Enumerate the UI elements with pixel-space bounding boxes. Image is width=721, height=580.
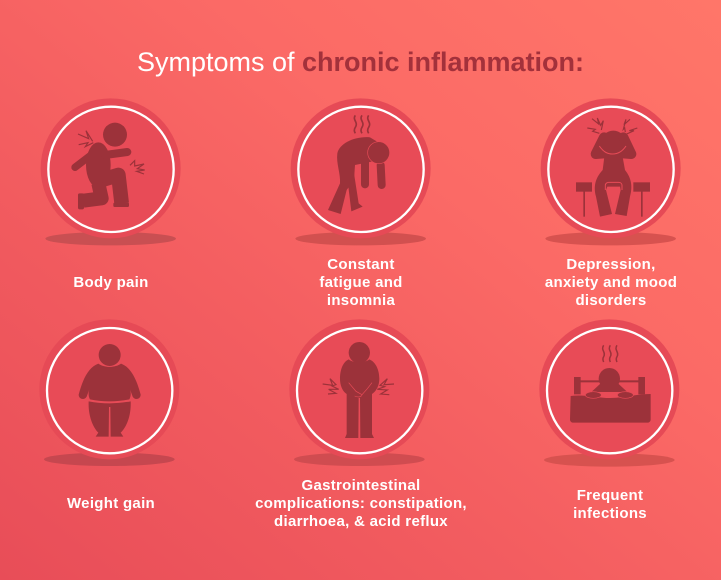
label: gastrointestinal: diarrhoea, & acid reflux	[274, 513, 448, 530]
label: body pain: Body pain	[73, 274, 149, 291]
title: Symptoms of chronic inflammation:	[137, 47, 584, 77]
icon: body pain	[41, 98, 181, 245]
label: fatigue	[319, 256, 403, 309]
label: gastrointestinal: complications: constipation,	[255, 495, 467, 512]
label: gastrointestinal: Gastrointestinal	[302, 477, 420, 494]
label: infections: Frequent	[577, 487, 643, 504]
icon: fatigue	[291, 98, 431, 245]
label: weight gain: Weight gain	[67, 495, 155, 512]
label: depression	[545, 256, 677, 309]
icon: infections	[539, 319, 679, 467]
label: gastrointestinal	[255, 477, 467, 530]
label: fatigue: insomnia	[327, 292, 395, 309]
icon: gastrointestinal	[289, 319, 429, 466]
label: fatigue: Constant	[327, 256, 395, 273]
icon: weight gain	[39, 319, 179, 466]
label: infections	[573, 487, 647, 522]
label: depression: Depression,	[566, 256, 656, 273]
icon: depression	[541, 98, 681, 245]
label: depression: disorders	[575, 292, 647, 309]
label: fatigue: fatigue and	[319, 274, 403, 291]
label: infections: infections	[573, 505, 647, 522]
label: depression: anxiety and mood	[545, 274, 677, 291]
